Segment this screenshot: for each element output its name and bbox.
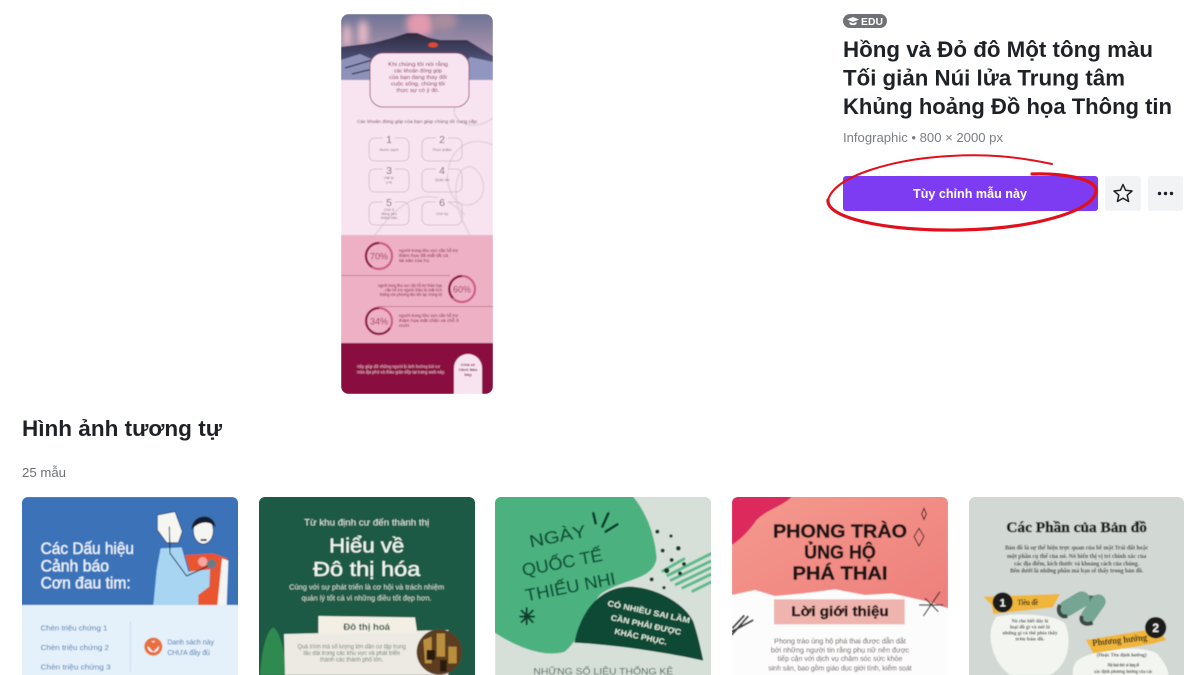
panel: step one title ribbon (983, 592, 1060, 614)
stat: 60% ring: không còn phương tiện liên lạc chúng tôi (380, 292, 442, 297)
button: favorite star (1105, 176, 1141, 211)
icon: dot spray (650, 530, 686, 589)
panel: six numbered boxes: y tế (386, 180, 393, 184)
heading: card two title (313, 535, 421, 581)
panel: six numbered boxes: 1 (386, 134, 392, 146)
heading: card one title: Các Dấu hiệu (41, 539, 134, 558)
panel: intro label: Lời giới thiệu (791, 603, 889, 619)
panel: six numbered boxes (369, 134, 462, 225)
title: Hồng và Đỏ đô Một tông màu (843, 37, 1153, 62)
panel: step one blob: Nó cho biết đây là (1012, 620, 1049, 625)
title (843, 37, 1172, 119)
callout: quote box: Khi chúng tôi nói rằng (388, 61, 448, 68)
icon: pen strokes (732, 615, 753, 635)
callout: quote box: cuộc sống, chúng tôi (391, 82, 445, 88)
badge: EDU: EDU (861, 17, 883, 28)
panel: step two blob: (Hoặc Tên định hướng) (1097, 654, 1147, 659)
heading: similar images: Hình ảnh tương tự (22, 416, 222, 441)
button: customize template (843, 176, 1098, 211)
text: symptom list: Chèn triệu chứng 3 (41, 662, 111, 671)
text: template count: 25 mẫu (22, 465, 66, 480)
panel: intro label (774, 599, 905, 624)
panel: six numbered boxes: 2 (439, 134, 445, 146)
panel: six numbered boxes: 3 (386, 165, 392, 177)
panel: paper note: lâu dài trong các khu vực và phát triển (303, 650, 400, 657)
panel: six numbered boxes: Vật tư (384, 176, 395, 180)
card: international children's day (493, 495, 715, 675)
card: heart attack warning signs (20, 497, 240, 675)
panel: paper note: Quá trình mà số lượng lớn dân cư tập trung (297, 644, 406, 650)
text: card four paragraph: sinh sản, bao gồm giáo dục giới tính, kiểm soát (768, 663, 912, 672)
text: card five description: Bên dưới là những phần mà bạn sẽ thấy trong bản đồ. (1010, 568, 1144, 575)
text: contributions intro: Các khoản đóng góp của bạn giúp chúng tôi cung cấp: (357, 118, 478, 124)
panel: six numbered boxes: Quần áo (435, 178, 449, 182)
heading: card four title: PHÁ THAI (792, 562, 887, 583)
panel: six numbered boxes: Chữ ký (436, 212, 448, 216)
heading: card four title: PHONG TRÀO (773, 520, 907, 541)
panel: pale pink body (341, 80, 493, 235)
badge: EDU (843, 14, 887, 28)
stat: 34% ring: mới (399, 323, 409, 328)
title: Tối giản Núi lửa Trung tâm (843, 66, 1125, 90)
button: customize template: Tùy chỉnh mẫu này (913, 186, 1028, 201)
text: list note (167, 640, 215, 657)
text: symptom list (41, 624, 111, 671)
panel: paper note: thành các thành phố lớn. (320, 658, 384, 664)
heading: card four title: ỦNG HỘ (804, 542, 876, 563)
text: card four paragraph: tiếp cận với dịch vụ chăm sóc sức khỏe (777, 654, 903, 663)
panel: step two blob (1073, 649, 1169, 675)
text: card five description: Bản đồ là sự thể hiện trực quan của bề mặt Trái đất hoặc (1005, 545, 1149, 552)
text: card four paragraph: Phong trào ủng hộ phá thai được dẫn dắt (774, 636, 906, 645)
panel: dark blob with message: KHẮC PHỤC. (614, 627, 668, 647)
panel: step one title ribbon: Tiêu đề (1017, 598, 1038, 607)
heading: card two title: Đô thị hóa (313, 558, 421, 581)
panel: six numbered boxes: 6 (439, 197, 445, 209)
heading: card three title: THIẾU NHI (523, 568, 617, 605)
stat: 70% ring: người trong khu vực cần hỗ trợ (399, 248, 458, 253)
button: arch call to action: Cảnh Báo (459, 367, 478, 372)
icon: green scribble (662, 553, 712, 592)
icon: crumpled crimson corner (732, 495, 793, 545)
text: card two kicker: Từ khu định cư đến thành thị (304, 517, 429, 527)
stat: 70% ring (366, 243, 458, 269)
icon: green blob (493, 495, 657, 654)
panel: six numbered boxes: Thực phẩm (432, 148, 452, 152)
stat: 34% ring: 34% (370, 316, 388, 326)
icon: city photo circle (417, 629, 462, 675)
icon: asterisk scribble (919, 592, 943, 616)
panel: six numbered boxes: 4 (439, 165, 445, 177)
icon: tree (260, 627, 287, 675)
stat: 34% ring (366, 308, 459, 334)
icon: heart badge (146, 639, 161, 654)
stat: 60% ring: người trong khu vực cần hỗ trợ thảm họa (378, 283, 443, 288)
panel: paper note (284, 616, 448, 675)
panel: step one blob: trên bản đồ. (1015, 638, 1046, 643)
button: arch call to action: Chia sẻ (461, 362, 476, 367)
panel: step one blob: những gì có thể phía thấy (1002, 631, 1058, 637)
icon: sparkles (914, 508, 926, 546)
text: list note: Danh sách này (167, 640, 215, 647)
stat: 60% ring: cần hỗ trợ người thân bị mất tích (385, 288, 443, 292)
text: card two description (289, 584, 444, 603)
heading: card three title: NGÀY (528, 521, 588, 551)
stat: 70% ring: thảm họa đã mất tất cả (399, 253, 449, 258)
button: arch call to action: Này (464, 372, 472, 377)
panel: step one blob: loại đồ gì và nói lá (1010, 626, 1051, 631)
title: Khủng hoảng Đồ họa Thông tin (843, 94, 1172, 119)
heading: card three title (522, 524, 616, 601)
icon: doctor and patient illustration (153, 512, 228, 605)
panel: six numbered boxes: đáng yêu (381, 212, 397, 216)
text: card four paragraph: bởi những người tin rằng phụ nữ nên được (771, 646, 910, 655)
heading: card four title (773, 520, 907, 583)
panel: maroon footer: Hãy giúp đỡ những người bị ảnh hưởng bởi cơ (357, 364, 440, 369)
heading: card one title (41, 539, 134, 592)
text: card four paragraph (768, 636, 912, 672)
panel: six numbered boxes: Chỗ ở (384, 207, 395, 212)
text: card two description: Cùng với sự phát triển là cơ hội và trách nhiệm (289, 584, 444, 592)
card: parts of a map (968, 495, 1188, 675)
stat: 34% ring: thảm họa mất chăn và chỗ ở (399, 318, 459, 323)
panel: dark blob with message: CẦN PHẢI ĐƯỢC (610, 612, 682, 637)
panel: six numbered boxes: Nước sạch (380, 148, 398, 152)
heading: card one title: Cơn đau tim: (41, 573, 131, 592)
arrow: red hand-drawn circle around button (828, 155, 1096, 230)
infographic template preview (341, 11, 493, 394)
panel: paper note: Đô thị hoá (343, 622, 391, 632)
callout: quote box: của bạn đang thay đổi (389, 74, 447, 81)
heading: card three title: QUỐC TẾ (520, 545, 604, 580)
icon: emphasis strokes (593, 513, 617, 532)
stat: 60% ring: 60% (453, 284, 471, 294)
panel: step one title ribbon: 1 (1000, 597, 1006, 609)
panel: dark blob with message: CÓ NHIỀU SAI LẦM (607, 598, 691, 625)
stat: 70% ring: 70% (370, 252, 388, 262)
text: list note: CHƯA đầy đủ (167, 648, 210, 657)
text: format and size: Infographic • 800 × 2000 px (843, 130, 1003, 145)
text: symptom list: Chèn triệu chứng 1 (41, 624, 107, 633)
panel: statistics band (341, 235, 493, 343)
button: arch call to action (454, 354, 482, 394)
panel: volcano header photo (341, 11, 493, 80)
panel: step one blob (990, 614, 1069, 675)
text: card five description: các địa điểm, kích thước và khoảng cách của chúng. (1014, 560, 1140, 567)
text: card five description (1005, 545, 1149, 575)
card: pro-choice movement (732, 495, 948, 675)
text: card five description: một phần cụ thể của nó. Nó hiển thị vị trí chính xác của (1007, 553, 1146, 560)
card: understanding urbanization (257, 495, 477, 675)
panel: step two blob: Một hình thức sử dụng để (1107, 663, 1140, 669)
callout: quote box: thực sự có ý đó. (396, 88, 440, 94)
panel: step two blob: xác định phương hướng của các (1094, 670, 1153, 675)
panel: six numbered boxes: 5 (386, 197, 392, 209)
stat: 60% ring (378, 276, 475, 302)
icon: binoculars (1059, 598, 1098, 624)
text: card two description: quản lý tốt cả vì những điều tốt đẹp hơn. (302, 594, 432, 603)
text: symptom list: Chèn triệu chứng 2 (41, 643, 109, 652)
panel: maroon footer: nửa địa phủ và thảo gián tiếp tại trang web này. (357, 370, 445, 374)
heading: card one title: Cảnh báo (41, 557, 109, 576)
button: more options (1148, 176, 1183, 211)
stat: 34% ring: người trong khu vực cần hỗ trợ (399, 313, 458, 318)
panel: salmon torn paper (732, 495, 948, 608)
callout: quote box (370, 53, 469, 107)
stat: 70% ring: tài sản của họ (399, 258, 430, 263)
panel: maroon footer (341, 343, 493, 394)
panel: step two title ribbon: 2 (1152, 621, 1159, 635)
heading: card two title: Hiểu về (329, 535, 404, 558)
icon: star scribble (519, 607, 535, 625)
heading: card five title: Các Phần của Bản đồ (1006, 520, 1147, 536)
panel: six numbered boxes: nhiều việc (380, 216, 398, 220)
panel: step two title ribbon (1086, 617, 1167, 653)
panel: dark blob with message (574, 587, 703, 661)
callout: quote box: các khoản đóng góp (394, 68, 442, 74)
panel: step two title ribbon: Phương hướng (1092, 633, 1148, 649)
